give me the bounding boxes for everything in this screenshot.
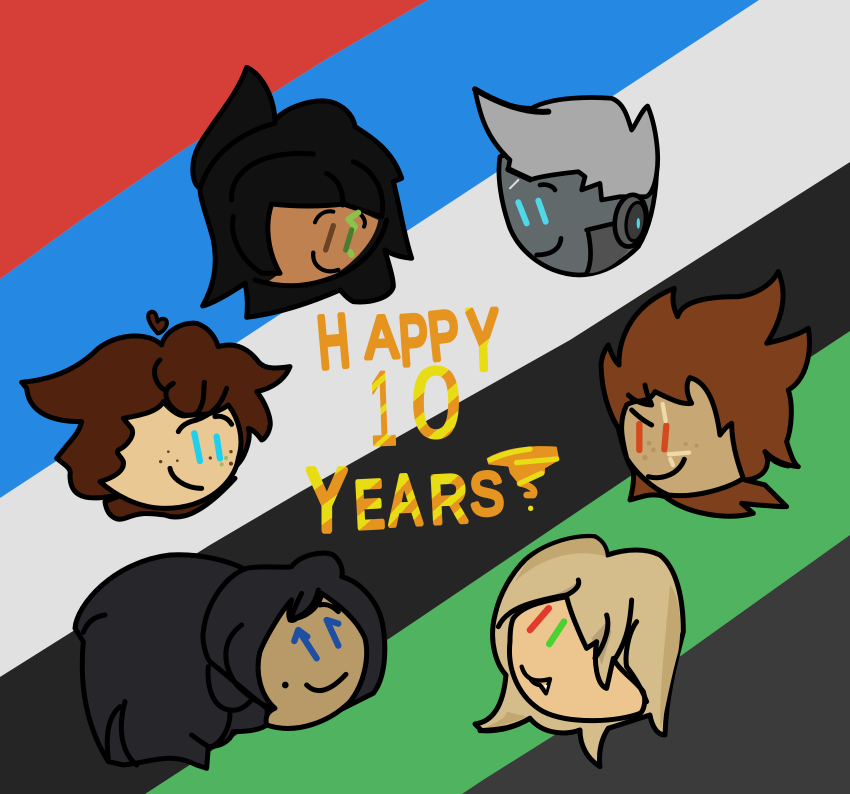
pale marks [663, 404, 689, 465]
scribble flourish [487, 446, 559, 511]
lettering: HAPPY: H [314, 299, 353, 384]
character head: blond hair [475, 536, 683, 767]
lettering: HAPPY [314, 293, 500, 387]
heart [148, 312, 167, 333]
character head: brown hair with heart [22, 312, 290, 519]
lettering: YEARS: S [468, 459, 505, 528]
lettering: YEARS: R [428, 461, 470, 537]
lettering: 10: 1 [367, 351, 399, 468]
lettering: YEARS: E [353, 466, 386, 542]
dot [528, 506, 533, 511]
fang and mouth [522, 667, 550, 693]
eyes [294, 620, 338, 658]
lettering: YEARS [307, 450, 505, 549]
character head: rust hair [601, 272, 809, 516]
lettering: 10: 0 [411, 348, 461, 459]
lettering: YEARS: A [387, 460, 423, 540]
hair shading [483, 538, 680, 730]
lettering: HAPPY: Y [465, 293, 500, 387]
eye marks [530, 608, 549, 630]
lettering: YEARS: Y [307, 450, 347, 549]
eyes [518, 201, 546, 223]
lettering: HAPPY: P [397, 301, 431, 381]
lettering: HAPPY: P [425, 298, 463, 375]
freckles [159, 450, 233, 466]
freckles [642, 441, 699, 460]
character head: black hair [193, 67, 412, 317]
eyes [639, 424, 666, 450]
ear [612, 193, 650, 249]
eyes [194, 433, 220, 461]
lettering: 10 [367, 348, 461, 468]
lettering: HAPPY: A [364, 303, 400, 371]
mole [282, 682, 289, 688]
character head: dark hood [75, 553, 385, 768]
character head: grey robot [475, 89, 658, 275]
eyes and mouth [313, 211, 365, 271]
